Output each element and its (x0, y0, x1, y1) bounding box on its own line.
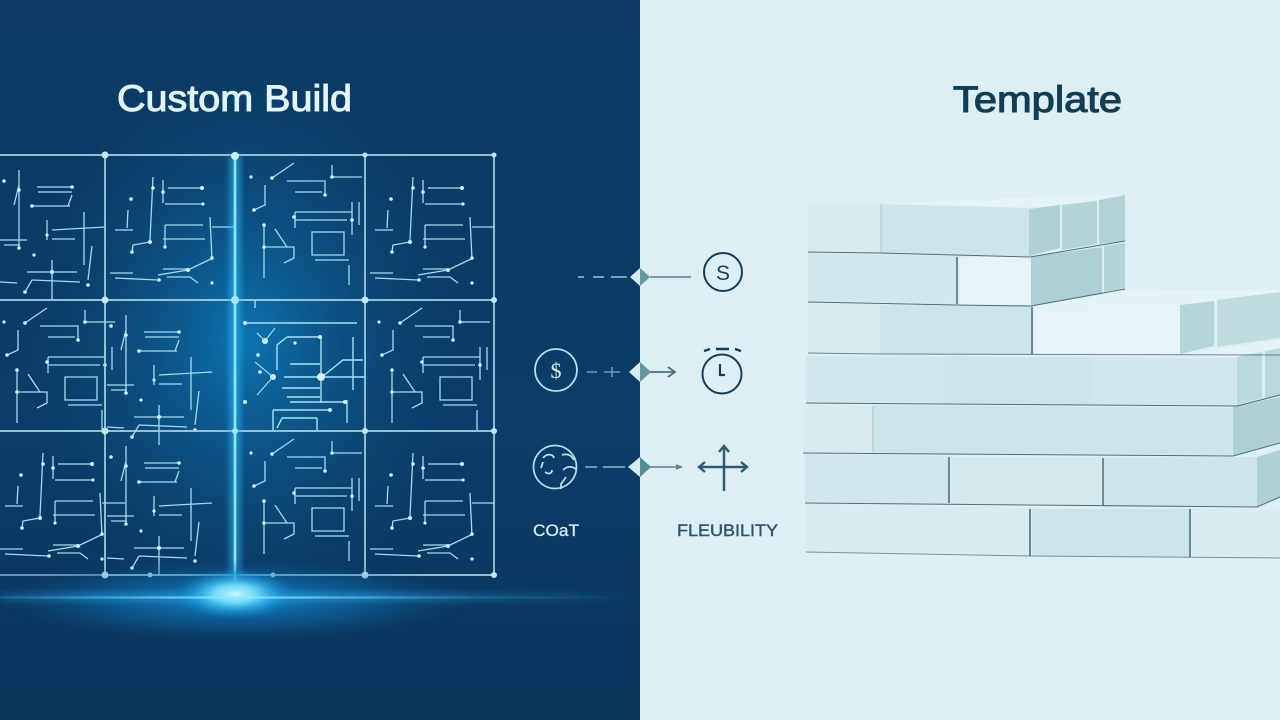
label: cost: COaT (533, 521, 579, 540)
grid lines (0, 155, 494, 575)
panel: custom build background (0, 0, 640, 720)
brick row 1 (808, 195, 1125, 256)
heading: template: Template (953, 79, 1122, 120)
brick row 2 (808, 243, 1125, 306)
brick wall (803, 195, 1280, 558)
heading: custom build: Custom Build (117, 78, 352, 119)
brick row 5 (803, 397, 1280, 456)
mortar joints (803, 204, 1280, 558)
chart: circuit blueprint grid (0, 152, 497, 580)
connector: row 1 (578, 268, 691, 286)
icon: stopwatch (702, 349, 742, 394)
brick row 6 (805, 450, 1280, 507)
icon: dollar circle right: S (716, 262, 730, 285)
label: flexibility: FLEUBILITY (677, 521, 778, 540)
icon: dollar circle right (704, 253, 742, 291)
panel: template background (640, 0, 1280, 720)
icon: dollar circle left: $ (550, 358, 562, 383)
connector: row 2 (587, 362, 675, 382)
icon: dollar circle left (535, 349, 577, 391)
brick row 7 (806, 504, 1280, 558)
top surfaces (881, 195, 1280, 357)
brick row 3 (808, 292, 1280, 355)
connector: row 3 (585, 457, 681, 477)
icon: globe (534, 446, 576, 489)
icon: multi-directional arrows (699, 446, 747, 491)
glowing vertical beam (229, 152, 241, 580)
brick row 4 (806, 348, 1280, 405)
circuit traces (0, 163, 495, 576)
base glow (0, 558, 640, 642)
